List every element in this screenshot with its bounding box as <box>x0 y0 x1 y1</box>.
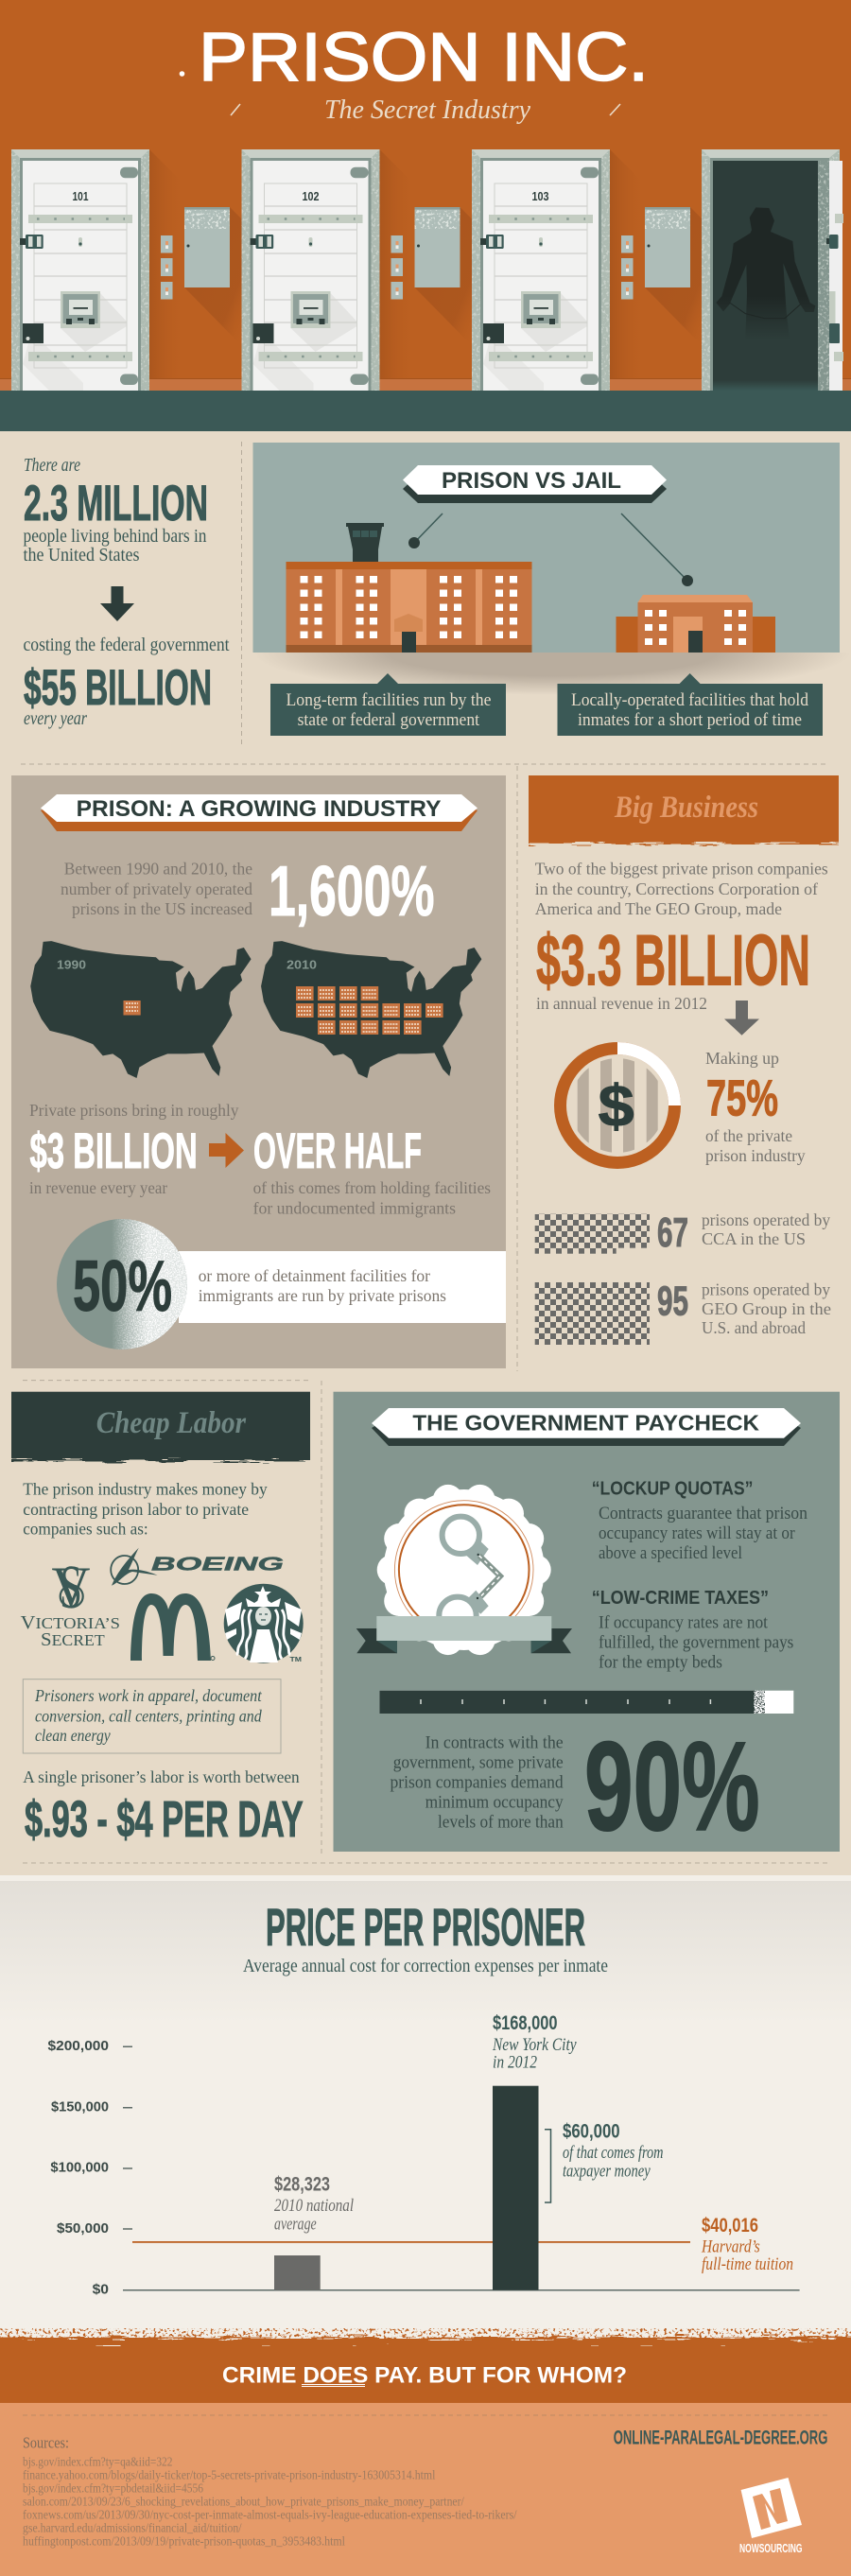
text: low-crime taxes: fulfilled, the government pays <box>599 1633 793 1653</box>
pointer: jail <box>621 513 693 586</box>
sources list: gse.harvard.edu/admissions/financial_aid/tuition/ <box>23 2522 242 2536</box>
label: harvard tuition: $40,016 <box>702 2215 758 2237</box>
sources list: foxnews.com/us/2013/09/30/nyc-cost-per-inmate-almost-equals-ivy-league-education-expenses-tied-to-rikers/ <box>23 2509 517 2523</box>
open cell door with silhouette <box>702 149 843 391</box>
arrow: down <box>724 1001 759 1036</box>
callout: prison work: Prisoners work in apparel, document <box>34 1686 263 1705</box>
chart: 75 percent ring: $ <box>599 1074 634 1140</box>
label: national average: 2010 national <box>274 2196 354 2216</box>
label: harvard tuition: full-time tuition <box>702 2254 793 2274</box>
text: people behind bars <box>23 526 206 566</box>
heading: big business: Big Business <box>614 791 758 825</box>
text: private prisons bring: Private prisons bring in roughly <box>29 1101 238 1120</box>
text: in contracts: minimum occupancy <box>426 1792 564 1812</box>
logo: victorias secret: SECRET <box>41 1629 105 1650</box>
sources list: huffingtonpost.com/2013/09/19/private-prison-quotas_n_3953483.html <box>23 2535 345 2550</box>
text: in revenue: in revenue every year <box>29 1178 167 1197</box>
text: costing: costing the federal government <box>23 635 230 655</box>
panel: cheap labor <box>0 1392 321 1848</box>
stat: 67 prisons: prisons operated by <box>702 1210 830 1229</box>
callout: 50 percent: or more of detainment facilities for <box>199 1266 430 1285</box>
map: 2010 <box>261 941 481 1078</box>
bracket and label: taxpayer money <box>545 2121 664 2202</box>
text: low-crime taxes: for the empty beds <box>599 1653 722 1673</box>
panel: the government paycheck <box>333 1392 840 1857</box>
chart: y axis: $50,000 <box>57 2220 109 2237</box>
text: lockup quotas: Contracts guarantee that prison <box>599 1504 808 1523</box>
bracket and label: taxpayer money: taxpayer money <box>563 2162 651 2182</box>
text: prison labor intro: The prison industry makes money by <box>23 1479 268 1498</box>
text: making up 75 percent: 75% <box>706 1070 778 1127</box>
chart: 75 percent ring <box>560 1048 675 1163</box>
text: two of the biggest: Two of the biggest private prison companies <box>535 859 828 878</box>
chart: occupancy bar <box>379 1691 793 1714</box>
label: new york city: New York City <box>492 2035 577 2055</box>
logo: victorias secret: VICTORIA’S <box>21 1612 120 1633</box>
cell door 102 <box>242 149 460 391</box>
text: making up 75 percent: of the private <box>705 1126 792 1145</box>
text: making up 75 percent: Making up <box>705 1049 779 1068</box>
footer: sources panel <box>0 2403 851 2576</box>
ground shadow <box>253 653 851 738</box>
map: 1990: 1990 <box>57 957 86 972</box>
cell door 101: 101 <box>72 189 89 203</box>
caption: jail <box>558 673 823 736</box>
panel: prison vs jail <box>253 443 851 738</box>
baseboard <box>0 378 851 391</box>
stat: 90 percent: 90% <box>584 1716 760 1857</box>
wall shadows <box>149 149 703 378</box>
cell door 101 <box>11 149 230 391</box>
text: making up 75 percent <box>705 1049 806 1165</box>
sources list <box>23 2433 517 2550</box>
text: prison labor intro: contracting prison labor to private <box>23 1500 249 1519</box>
bar: new york city <box>493 2086 539 2290</box>
callout: 50 percent: immigrants are run by private prisons <box>199 1286 446 1305</box>
chart: y axis: $200,000 <box>47 2038 109 2054</box>
text: of this comes: for undocumented immigrants <box>253 1199 456 1218</box>
stat: 67 prisons: CCA in the US <box>702 1229 806 1248</box>
footer: call to action band: CRIME DOES PAY. BUT FOR WHOM? <box>222 2362 627 2388</box>
logo: victorias secret <box>21 1553 120 1650</box>
chart: y axis: $150,000 <box>51 2099 109 2115</box>
stat: over half: OVER HALF <box>253 1123 422 1179</box>
stat: 1600 percent: 1,600% <box>269 851 435 931</box>
label: national average: average <box>274 2215 317 2235</box>
banner: growing industry: PRISON: A GROWING INDUSTRY <box>77 796 441 822</box>
stat: 95 prisons <box>535 1279 831 1345</box>
text: of this comes: of this comes from holding facilities <box>253 1178 491 1197</box>
subtitle <box>231 95 620 125</box>
banner: government paycheck: THE GOVERNMENT PAYCHECK <box>412 1411 759 1436</box>
logo: mcdonalds <box>130 1593 215 1661</box>
logo: nowsourcing: NOWSOURCING <box>739 2541 802 2555</box>
text: two of the biggest: America and The GEO Group, made <box>535 899 782 918</box>
subheading: Average annual cost for correction expenses per inmate <box>243 1956 608 1976</box>
logo: nowsourcing <box>739 2478 802 2555</box>
chart: y axis: $0 <box>93 2282 109 2298</box>
caption: prison: Long-term facilities run by the <box>286 690 492 710</box>
caption: jail: Locally-operated facilities that hold <box>571 690 808 710</box>
text: prison labor intro <box>23 1479 268 1538</box>
caption: prison <box>270 673 506 736</box>
stat: 2.3 million: 2.3 MILLION <box>24 476 208 531</box>
text: lockup quotas: above a specified level <box>599 1543 742 1563</box>
text: people behind bars: the United States <box>23 545 140 566</box>
text: there are: There are <box>24 455 80 476</box>
banner: prison vs jail: PRISON VS JAIL <box>442 468 621 494</box>
banner: government paycheck <box>372 1408 801 1446</box>
pointer: prison <box>408 513 443 548</box>
badge: handcuffs <box>356 1485 572 1655</box>
map: 1990 <box>30 941 252 1078</box>
text: low-crime taxes <box>592 1588 793 1673</box>
caption: jail: inmates for a short period of time <box>578 710 802 730</box>
text: of this comes <box>253 1178 491 1218</box>
text: low-crime taxes: “LOW-CRIME TAXES” <box>592 1588 769 1609</box>
callout: 50 percent: 50% <box>73 1246 172 1327</box>
arrow: right <box>209 1133 244 1168</box>
logo: boeing <box>111 1548 284 1586</box>
text: every year: every year <box>24 708 87 729</box>
text: prison labor intro: companies such as: <box>23 1519 148 1538</box>
footer: call to action band <box>0 2328 851 2403</box>
arrow: down <box>100 586 134 621</box>
panel: big business <box>511 775 851 1345</box>
logo: starbucks: TM <box>289 1657 302 1663</box>
sources list: bjs.gov/index.cfm?ty=pbdetail&iid=4556 <box>23 2482 203 2497</box>
map: 2010: 2010 <box>287 957 317 972</box>
stat: 95 prisons: U.S. and abroad <box>702 1318 806 1337</box>
logo: boeing: BOEING <box>151 1554 284 1575</box>
heading: price per prisoner: PRICE PER PRISONER <box>266 1897 585 1957</box>
callout: prison work <box>23 1680 281 1753</box>
text: lockup quotas <box>592 1479 808 1563</box>
label: new york city <box>492 2012 577 2073</box>
jail building <box>617 595 775 653</box>
text: two of the biggest: in the country, Corrections Corporation of <box>535 879 818 898</box>
text: in contracts <box>390 1732 564 1832</box>
callout: prison work: conversion, call centers, printing and <box>35 1706 263 1725</box>
heading: cheap labor: Cheap Labor <box>96 1406 247 1440</box>
prison building <box>286 523 531 653</box>
text: people behind bars: people living behind bars in <box>23 526 206 547</box>
label: harvard tuition: Harvard’s <box>701 2237 760 2257</box>
text: lockup quotas: occupancy rates will stay at or <box>599 1523 795 1543</box>
callout: prison work: clean energy <box>35 1726 111 1745</box>
floor <box>0 391 851 431</box>
text: between 1990 and 2010: prisons in the US increased <box>72 899 252 918</box>
logo: victorias secret: V <box>51 1556 91 1618</box>
bracket and label: taxpayer money: of that comes from <box>563 2143 664 2163</box>
text: between 1990 and 2010: number of privately operated <box>61 879 252 898</box>
stat: 55 billion: $55 BILLION <box>24 660 212 716</box>
panel: price per prisoner <box>0 1875 851 2353</box>
sources list: bjs.gov/index.cfm?ty=qa&iid=322 <box>23 2456 172 2470</box>
text: low-crime taxes: If occupancy rates are not <box>599 1613 769 1633</box>
heading: big business <box>511 775 851 844</box>
label: national average: $28,323 <box>274 2174 330 2196</box>
chart: y axis <box>47 2038 800 2298</box>
banner: prison vs jail <box>403 465 667 503</box>
label: harvard tuition <box>701 2215 793 2274</box>
title: PRISON INC. <box>199 20 649 96</box>
text: two of the biggest <box>535 859 828 918</box>
stat: 95 prisons: GEO Group in the <box>702 1299 831 1318</box>
heading: cheap labor <box>0 1392 321 1461</box>
text: in contracts: prison companies demand <box>390 1772 564 1792</box>
stat: 67 prisons: 67 <box>657 1210 688 1256</box>
callout: 50 percent <box>57 1219 506 1349</box>
text: making up 75 percent: prison industry <box>705 1146 806 1165</box>
banner: growing industry <box>41 794 478 831</box>
stat: 3 billion: $3 BILLION <box>30 1123 198 1179</box>
text: between 1990 and 2010: Between 1990 and 2010, the <box>64 859 252 878</box>
text: between 1990 and 2010 <box>61 859 252 918</box>
subtitle: The Secret Industry <box>324 95 530 125</box>
left stat column <box>23 455 230 729</box>
label: new york city: in 2012 <box>493 2053 537 2073</box>
panel: prison a growing industry <box>11 775 506 1368</box>
sources list: salon.com/2013/09/23/6_shocking_revelations_about_how_private_prisons_make_money_partner/ <box>23 2496 464 2510</box>
text: lockup quotas: “LOCKUP QUOTAS” <box>592 1479 753 1500</box>
text: in contracts: government, some private <box>393 1752 564 1772</box>
cell door 103: 103 <box>531 189 548 203</box>
sources list: Sources: <box>23 2433 69 2451</box>
label: national average <box>274 2174 354 2235</box>
logo: starbucks <box>224 1584 304 1663</box>
cell door 102: 102 <box>303 189 320 203</box>
caption: prison: state or federal government <box>298 710 480 730</box>
header panel <box>0 0 851 431</box>
text: in contracts: In contracts with the <box>426 1732 564 1752</box>
stat: 67 prisons <box>535 1210 830 1256</box>
label: new york city: $168,000 <box>493 2012 558 2034</box>
sources list: finance.yahoo.com/blogs/daily-ticker/top-5-secrets-private-prison-industry-163005314.html <box>23 2469 435 2483</box>
stat: 95 prisons: prisons operated by <box>702 1279 830 1298</box>
logo: victorias secret: S <box>60 1553 82 1622</box>
chart: y axis: $100,000 <box>50 2160 109 2176</box>
text: single prisoner: A single prisoner’s labor is worth between <box>23 1767 300 1786</box>
text: in annual revenue: in annual revenue in 2012 <box>536 994 707 1013</box>
stat: 95 prisons: 95 <box>657 1279 688 1325</box>
bracket and label: taxpayer money: $60,000 <box>563 2121 620 2143</box>
text: in contracts: levels of more than <box>438 1812 564 1832</box>
chart: harvard tuition line <box>132 2241 690 2243</box>
bar: national average <box>274 2255 321 2290</box>
stat: per day: $.93 - $4 PER DAY <box>25 1791 304 1848</box>
cell door 103 <box>472 149 690 391</box>
